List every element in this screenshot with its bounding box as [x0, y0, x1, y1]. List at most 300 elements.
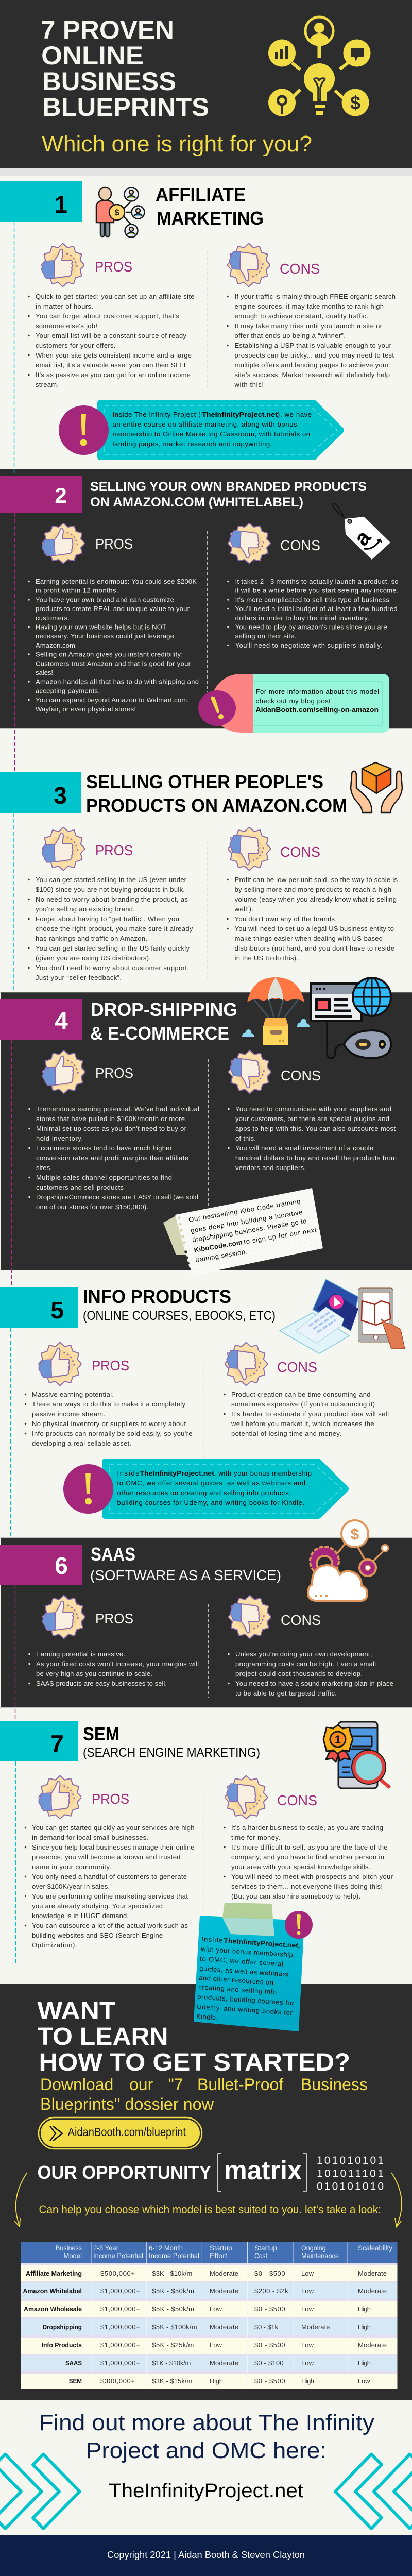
pros list: [28, 578, 199, 713]
cons list: You'll need to negotiate with suppliers initially.: [235, 641, 382, 649]
icon: phone medal and magnifier: [323, 1722, 389, 1788]
callout: blog post link: For more information about this model: [255, 688, 379, 696]
pros list: As your fixed costs won't increase, your margins will: [36, 1660, 199, 1668]
callout: kibo code note: to sign up for our next: [243, 1226, 317, 1246]
icon: affiliate network: [96, 187, 144, 237]
panel: section 2 selling your own branded products: [0, 476, 399, 772]
download text: Bullet-Proof: [197, 2075, 283, 2094]
pros list: You have your own brand and can customize: [36, 596, 174, 603]
cons list: well!).: [234, 905, 253, 913]
heading: our opportunity matrix: [37, 2154, 384, 2193]
cons list: apps to help with this. You can also outsource most: [235, 1125, 396, 1132]
cons list: multiple offers and landing pages to achieve your: [235, 361, 389, 369]
heading: want to learn: WANT: [37, 1997, 116, 2025]
heading: [83, 1723, 260, 1760]
cons list: make things easier when dealing with US-based: [235, 935, 383, 942]
cons list: hundred dollars to buy and resell the products from: [235, 1154, 397, 1162]
heading: AFFILIATE: [156, 184, 246, 205]
pros list: Your email list will be a constant source of ready: [36, 332, 186, 340]
row: amazon wholesale: $1,000,000+: [100, 2305, 140, 2313]
pros list: sales!: [36, 669, 53, 676]
cons list: You neeed to have a sound marketing plan in place: [235, 1680, 393, 1687]
pros list: [28, 1650, 199, 1687]
pros list: stream.: [36, 381, 59, 388]
table header row: Model: [64, 2252, 82, 2260]
cons list: sometimes expensive (If you're outsourcing it): [231, 1400, 375, 1408]
icon: parachute parcel: [242, 977, 310, 1045]
heading: want to learn: HOW TO GET STARTED?: [39, 2049, 350, 2076]
cons list: engine sources, it may take months to rank high: [235, 302, 384, 310]
cons list: Product creation can be time consuming and: [231, 1391, 371, 1398]
pros list: over $100K/year in sales.: [32, 1883, 110, 1890]
table: opportunity matrix: [21, 2242, 398, 2389]
panel: section 2 background: [0, 469, 412, 728]
callout: sticky note: creating and selling info: [198, 1983, 277, 1996]
pros list: You can get started selling in the US fairly quickly: [36, 944, 190, 952]
cons list: selling on their site.: [235, 632, 297, 640]
pros list: Since you help local businesses manage their online: [32, 1843, 195, 1851]
heading: [90, 1544, 281, 1583]
number box 3: [0, 772, 81, 813]
callout: infinity project info products: Inside: [117, 1469, 139, 1477]
pros list: You only need a handful of customers to generate: [32, 1873, 187, 1880]
heading: SAAS: [91, 1544, 135, 1565]
cons list: well before you market it, which increases the: [231, 1420, 374, 1428]
pros list: conversion rates and profit margins than affiliate: [36, 1154, 188, 1162]
row: sem: $300,000+: [100, 2377, 135, 2385]
panel: section 6 software as a service: [0, 1520, 393, 1721]
table header row: [56, 2244, 392, 2260]
cons label: CONS: [277, 1359, 317, 1375]
pros list: No need to worry about branding the product, as: [36, 895, 188, 903]
panel: section 6 background: [1, 1538, 412, 1707]
icon: thumbs up: [38, 1775, 81, 1819]
icon: thumbs down: [228, 827, 271, 871]
pros list: [28, 293, 195, 388]
panel: call to action: [14, 1997, 402, 2389]
row: info products: Low: [301, 2341, 314, 2349]
row: sem: High: [210, 2377, 223, 2385]
pros list: When your site gets consistent income and a large: [36, 351, 192, 359]
callout: kibo code note: KiboCode.com: [194, 1238, 243, 1254]
download text: [40, 2075, 368, 2113]
cons list: It's more difficult to sell, as you are the face of the: [231, 1843, 387, 1851]
heading: DROP-SHIPPING: [91, 999, 237, 1020]
heading: [83, 1286, 276, 1323]
row: affiliate marketing: Moderate: [210, 2269, 238, 2277]
pros list: There are ways to do this to make it a completely: [32, 1400, 185, 1408]
row: amazon wholesale: Amazon Wholesale: [24, 2305, 82, 2313]
title: BUSINESS: [42, 67, 176, 96]
cons list: If your traffic is mainly through FREE organic search: [235, 293, 396, 300]
row: info products: [42, 2341, 387, 2349]
pros list: It's as passive as you can get for an online income: [36, 371, 191, 379]
row: amazon wholesale: High: [358, 2305, 371, 2313]
heading: [156, 184, 264, 229]
pros list: SAAS products are easy businesses to sell.: [36, 1680, 167, 1687]
pros list: you're selling an existing brand.: [36, 905, 135, 913]
callout: blog post link: AidanBooth.com/selling-on-amazon: [255, 706, 379, 714]
cons list: [227, 876, 398, 962]
pros list: [28, 876, 193, 981]
row: affiliate marketing: [26, 2269, 387, 2277]
pros list: customers.: [36, 614, 70, 622]
cons list: distributors (not hard, and you don't have to reside: [235, 944, 394, 952]
icon: lightbulb with connected ideas: [268, 17, 371, 116]
pros list: Massive earning potential.: [32, 1391, 114, 1398]
pros list: (given you are using US distributors).: [36, 954, 151, 962]
icon: thumbs up: [42, 523, 85, 564]
row: info products: Moderate: [358, 2341, 387, 2349]
cons label: CONS: [280, 537, 320, 553]
table header row: Maintenance: [301, 2252, 339, 2260]
pros list: customers and sell products: [36, 1183, 124, 1191]
cons list: It may take many tries until you launch a site or: [235, 322, 383, 330]
heading: our opportunity matrix: matrix: [224, 2156, 302, 2185]
icon: thumbs down: [225, 1343, 268, 1386]
pros list: $100) since you are not buying products in bulk.: [36, 886, 185, 893]
pros list: Minimal set up costs as you don't need to buy or: [36, 1125, 187, 1132]
pros list: Forget about having to “get traffic”. When you: [36, 915, 179, 923]
cons list: your customers, but there are special plugins and: [235, 1115, 389, 1123]
number box 1: 1: [54, 191, 67, 218]
callout: sticky note: with your bonus membership: [200, 1945, 293, 1959]
row: dropshipping: $1,000,000+: [100, 2323, 140, 2331]
callout: sticky note: guides, as well as webinars: [199, 1964, 289, 1978]
table header row: Effort: [210, 2252, 227, 2260]
cons list: company, and you have to find another person in: [231, 1853, 384, 1861]
cons label: CONS: [281, 1067, 321, 1083]
cons list: time for money.: [231, 1834, 280, 1841]
cons label: CONS: [280, 844, 320, 860]
icon: saas cloud and gear: $: [351, 1526, 359, 1543]
panel: call to action background: [0, 1984, 412, 2400]
pros list: has rankings and traffic on Amazon.: [36, 935, 147, 942]
pros list: You can outsource a lot of the actual work such as: [32, 1922, 188, 1929]
panel: section 5 info products: [0, 1279, 405, 1538]
cons list: services to them... not everyone likes doing this!: [231, 1883, 383, 1890]
callout: infinity project affiliate course: membership to Online Marketing Classroom, with tutorials on: [112, 430, 310, 438]
cons list: your area with your special knowledge skills.: [231, 1863, 371, 1871]
row: amazon whitelabel: $200 - $2k: [254, 2287, 288, 2295]
icon: thumbs up: [38, 1343, 81, 1386]
number box 6: [0, 1545, 82, 1585]
cons list: It's more complicated to sell this type of business: [235, 596, 389, 603]
panel: find out more: [0, 2410, 412, 2529]
pros list: customers for your offers.: [36, 342, 115, 349]
number box 2: [0, 476, 82, 513]
heading: our opportunity matrix: 101010101: [317, 2155, 384, 2166]
pros list: Customers trust Amazon and that is good for your: [36, 659, 191, 667]
row: saas: $1K - $10k/m: [152, 2359, 191, 2367]
icon: thumbs up: [42, 1050, 85, 1093]
callout: infinity project info products: , with your bonus membership: [214, 1469, 312, 1477]
row: dropshipping: $5K - $100k/m: [152, 2323, 197, 2331]
button: dossier link: [39, 2117, 202, 2149]
cons list: [224, 1824, 393, 1900]
heading: (SOFTWARE AS A SERVICE): [90, 1567, 281, 1583]
row: info products: $0 - $500: [254, 2341, 285, 2349]
panel: section 3 selling other people's products: [0, 762, 402, 992]
panel: grey band: [0, 168, 412, 176]
icon: thumbs down: [227, 243, 270, 286]
callout: infinity project info products: to OMC, we offer several guides, as well as webinars and: [117, 1479, 305, 1487]
pros list: You can get started selling in the US (even under: [36, 876, 187, 884]
heading: our opportunity matrix: 010101010: [317, 2180, 384, 2193]
table header row: Startup: [210, 2244, 232, 2252]
pros label: PROS: [95, 536, 133, 552]
pros list: products to create REAL and unique value to your: [36, 605, 190, 613]
row: dropshipping: High: [358, 2323, 371, 2331]
pros list: in demand for local small businesses.: [32, 1834, 148, 1841]
pros list: developing a real sellable asset.: [32, 1439, 131, 1447]
pros list: you are already studying. Your specialized: [32, 1902, 163, 1910]
table header row: Income Potential: [149, 2252, 199, 2260]
pros list: Having your own website helps but is NOT: [36, 623, 166, 631]
pros list: knowledge is in HUGE demand.: [32, 1912, 129, 1920]
pros label: PROS: [95, 842, 133, 858]
cons list: [224, 1391, 389, 1437]
cons label: CONS: [280, 261, 320, 277]
icon: laptop course and ebook phone: [280, 1279, 405, 1353]
cons list: enough to achieve constant, quality traffic.: [235, 312, 368, 320]
pros list: Amazon handles all that has to do with shipping and: [36, 678, 199, 686]
download text: "7: [168, 2075, 183, 2094]
pros list: sites.: [36, 1164, 52, 1172]
icon: chevrons left: [0, 2454, 80, 2529]
callout: kibo code note: training session.: [195, 1247, 248, 1264]
table header row: 2-3 Year: [93, 2244, 118, 2252]
row: saas: Low: [301, 2359, 314, 2367]
heading: find out more: Find out more about The Infinity: [39, 2410, 374, 2435]
pros list: accepting payments.: [36, 687, 100, 694]
panel: section 4 drop-shipping and e-commerce: [0, 977, 397, 1287]
row: affiliate marketing: $3K - $10k/m: [152, 2269, 192, 2277]
row: sem: High: [301, 2377, 314, 2385]
cons list: offer that ends up being a “winner”.: [235, 332, 346, 340]
table header row: Ongoing: [301, 2244, 326, 2252]
row: amazon whitelabel: $1,000,000+: [100, 2287, 140, 2295]
cons list: [227, 578, 399, 649]
pros list: Amazon.com: [36, 641, 75, 649]
pros list: You don't need to worry about customer support.: [36, 964, 189, 972]
callout: sticky note: and other resources on: [199, 1974, 273, 1987]
heading: (SEARCH ENGINE MARKETING): [83, 1745, 260, 1760]
row: affiliate marketing: Moderate: [358, 2269, 387, 2277]
heading: ON AMAZON.COM (WHITELABEL): [90, 495, 303, 510]
heading: our opportunity matrix: OUR OPPORTUNITY: [37, 2162, 211, 2183]
pros list: Just your “seller feedback”.: [36, 974, 122, 981]
callout: infinity project affiliate course: [59, 403, 341, 457]
pros list: Multiple sales channel opportunities to find: [36, 1174, 172, 1181]
table header row: Scaleability: [358, 2244, 392, 2252]
panel: section 1 background: [0, 176, 412, 469]
pros label: PROS: [92, 1791, 129, 1807]
pros list: You can expand beyond Amazon to Walmart.com,: [36, 696, 189, 704]
callout: infinity project affiliate course: an entire course on affiliate marketing, along with bonus: [112, 420, 297, 428]
cons list: You will need to meet with prospects and pitch your: [231, 1873, 393, 1880]
cons list: You'll need a initial budget of at least a few hundred: [235, 605, 398, 613]
callout: infinity project info products: other resources on creating and selling info products,: [117, 1489, 291, 1497]
cons list: with this!: [234, 381, 264, 388]
row: dropshipping: $0 - $1k: [254, 2323, 278, 2331]
cons label: CONS: [281, 1612, 321, 1628]
callout: infinity project affiliate course: ), we have: [278, 411, 312, 418]
number box 7: [0, 1721, 78, 1761]
cons list: dollars in order to buy the initial inventory.: [235, 614, 369, 622]
row: info products: Info Products: [42, 2341, 82, 2349]
panel: section 7 search engine marketing: [0, 1721, 393, 2031]
matrix intro text: Can help you choose which model is best suited to you. let's take a look:: [39, 2203, 381, 2216]
heading: SEM: [83, 1723, 119, 1744]
callout: sticky note: Kindle.: [196, 2012, 218, 2022]
button: dossier link: AidanBooth.com/blueprint: [68, 2125, 186, 2139]
icon: saas cloud and gear: [308, 1520, 388, 1601]
cons list: in the US to do this).: [235, 954, 298, 962]
pros list: [28, 1105, 199, 1211]
row: info products: $1,000,000+: [100, 2341, 140, 2349]
number box 6: 6: [55, 1552, 68, 1579]
cons list: Establishing a USP that is valuable enough to your: [235, 342, 392, 349]
number box 5: 5: [50, 1297, 64, 1324]
icon: amazon price tag: a: [349, 525, 375, 550]
cons list: You need to play by amazon's rules since you are: [235, 623, 387, 631]
callout: kibo code note: goes deep into building a lucrative: [190, 1208, 303, 1234]
icon: thumbs down: [228, 1595, 271, 1638]
row: sem: SEM: [69, 2377, 82, 2385]
row: affiliate marketing: $0 - $500: [254, 2269, 285, 2277]
callout: infinity project info products: TheInfinityProject.net: [140, 1469, 215, 1477]
icon: thumbs up: [41, 243, 84, 286]
cons list: Unless you're doing your own development,: [235, 1650, 372, 1658]
pros list: presence, you will become a known and trusted: [32, 1853, 180, 1861]
callout: infinity project affiliate course: Inside The Infinity Project (: [112, 411, 201, 418]
row: saas: High: [358, 2359, 371, 2367]
heading: find out more: [39, 2410, 374, 2463]
pros list: Tremendous earning potential. We've had individual: [36, 1105, 199, 1113]
heading: SELLING OTHER PEOPLE'S: [86, 771, 323, 792]
pros list: name in your community.: [32, 1863, 111, 1871]
pros list: passive income stream.: [32, 1410, 105, 1418]
cons list: [228, 1105, 397, 1172]
row: info products: Low: [210, 2341, 222, 2349]
cons list: programming costs can be high. Even a small: [235, 1660, 376, 1668]
pros list: Ecommece stores tend to have much higher: [36, 1144, 173, 1152]
pros list: [25, 1824, 195, 1949]
download text: Download: [40, 2075, 113, 2094]
subtitle: Which one is right for you?: [42, 131, 312, 157]
cons list: It's harder to estimate if your product idea will sell: [231, 1410, 389, 1418]
pros list: be very high as you continue to scale.: [36, 1670, 152, 1677]
icon: thumbs up: [42, 1595, 85, 1638]
table header row: Business: [56, 2244, 82, 2252]
icon: thumbs down: [228, 1050, 271, 1093]
cons list: of this.: [235, 1134, 256, 1142]
pros label: PROS: [95, 1611, 133, 1626]
cons list: It takes 2 - 3 months to actually launch a product, so: [235, 578, 399, 585]
icon: lightbulb with connected ideas: $: [350, 92, 360, 113]
cons list: (But you can also hire somebody to help).: [231, 1892, 360, 1900]
row: saas: $0 - $100: [254, 2359, 283, 2367]
heading: want to learn: TO LEARN: [37, 2023, 168, 2050]
pros list: email list, it's a valuable asset you can then SELL: [36, 361, 187, 369]
cons list: by selling more and more products to reach a high: [235, 886, 391, 893]
row: dropshipping: Dropshipping: [43, 2323, 82, 2331]
row: amazon whitelabel: Moderate: [210, 2287, 238, 2295]
arrow: left curved: [14, 2173, 27, 2227]
pros list: Quick to get started: you can set up an affiliate site: [36, 293, 195, 300]
pros list: Earning potential is enormous: You could see $200K: [36, 578, 197, 585]
panel: section 4 background: [1, 992, 412, 1270]
title: 7 PROVEN: [41, 15, 174, 44]
callout: blog post link: [198, 674, 389, 733]
cons list: You don't own any of the brands.: [235, 915, 337, 923]
cons list: prospects can be tricky... and you may need to test: [235, 351, 394, 359]
icon: affiliate network: $: [114, 208, 119, 217]
cons list: You need to communicate with your suppliers and: [235, 1105, 391, 1113]
cons list: potential of losing time and money.: [231, 1430, 341, 1437]
icon: thumbs down: [228, 523, 271, 564]
row: amazon whitelabel: $5K - $50k/m: [152, 2287, 194, 2295]
cons list: it will be a while before you start seeing any income.: [235, 587, 399, 595]
pros label: PROS: [95, 259, 132, 275]
callout: sticky note: [194, 1903, 313, 2031]
panel: section 1 affiliate marketing: [0, 181, 396, 475]
pros list: You can forget about customer support, that's: [36, 312, 179, 320]
pros list: No physical inventory or suppliers to worry about.: [32, 1420, 188, 1428]
row: dropshipping: Moderate: [210, 2323, 238, 2331]
pros list: in matter of hours.: [36, 302, 93, 310]
row: affiliate marketing: Affiliate Marketing: [26, 2269, 82, 2277]
cons list: [228, 1650, 393, 1697]
row: sem: $3K - $15k/m: [152, 2377, 192, 2385]
pros list: Dropship eCommece stores are EASY to sell (we sold: [36, 1193, 198, 1201]
row: dropshipping: Moderate: [301, 2323, 330, 2331]
cons list: to be able to get targeted traffic.: [235, 1689, 337, 1697]
row: saas: SAAS: [65, 2359, 82, 2367]
number box 7: 7: [50, 1730, 64, 1757]
number box 5: [0, 1287, 78, 1328]
row: affiliate marketing: Low: [301, 2269, 314, 2277]
pros label: PROS: [95, 1065, 133, 1081]
pros list: Earning potential is massive.: [36, 1650, 125, 1658]
callout: infinity project info products: [63, 1462, 346, 1516]
row: amazon whitelabel: Amazon Whitelabel: [23, 2287, 82, 2295]
row: info products: $5K - $25k/m: [152, 2341, 194, 2349]
panel: header background: [0, 0, 412, 168]
icon: chevrons right: [335, 2454, 412, 2529]
copyright: Copyright 2021 | Aidan Booth & Steven Clayton: [107, 2550, 305, 2560]
panel: section 5 background: [0, 1270, 412, 1538]
callout: infinity project info products: building courses for Udemy, and writing books for Kindle.: [117, 1499, 304, 1506]
pros list: in profit within 12 months.: [36, 587, 118, 595]
download text: our: [129, 2075, 153, 2094]
pros list: Info products can normally be sold easily, so you're: [32, 1430, 193, 1437]
row: amazon wholesale: $0 - $500: [254, 2305, 285, 2313]
callout: blog post link: check out my blog post: [255, 697, 331, 705]
arrow: right curved: [391, 2173, 402, 2227]
row: affiliate marketing: $500,000+: [100, 2269, 135, 2277]
title: [41, 15, 209, 122]
cons list: Profit can be low per unit sold, so the way to scale is: [235, 876, 398, 884]
icon: thumbs down: [225, 1775, 268, 1819]
number box 2: 2: [55, 483, 67, 507]
row: amazon whitelabel: [23, 2287, 387, 2295]
table header row: Startup: [254, 2244, 277, 2252]
pros list: building websites and SEO (Search Engine: [32, 1931, 163, 1939]
pros list: [25, 1391, 193, 1447]
panel: find out more background: [0, 2400, 412, 2535]
